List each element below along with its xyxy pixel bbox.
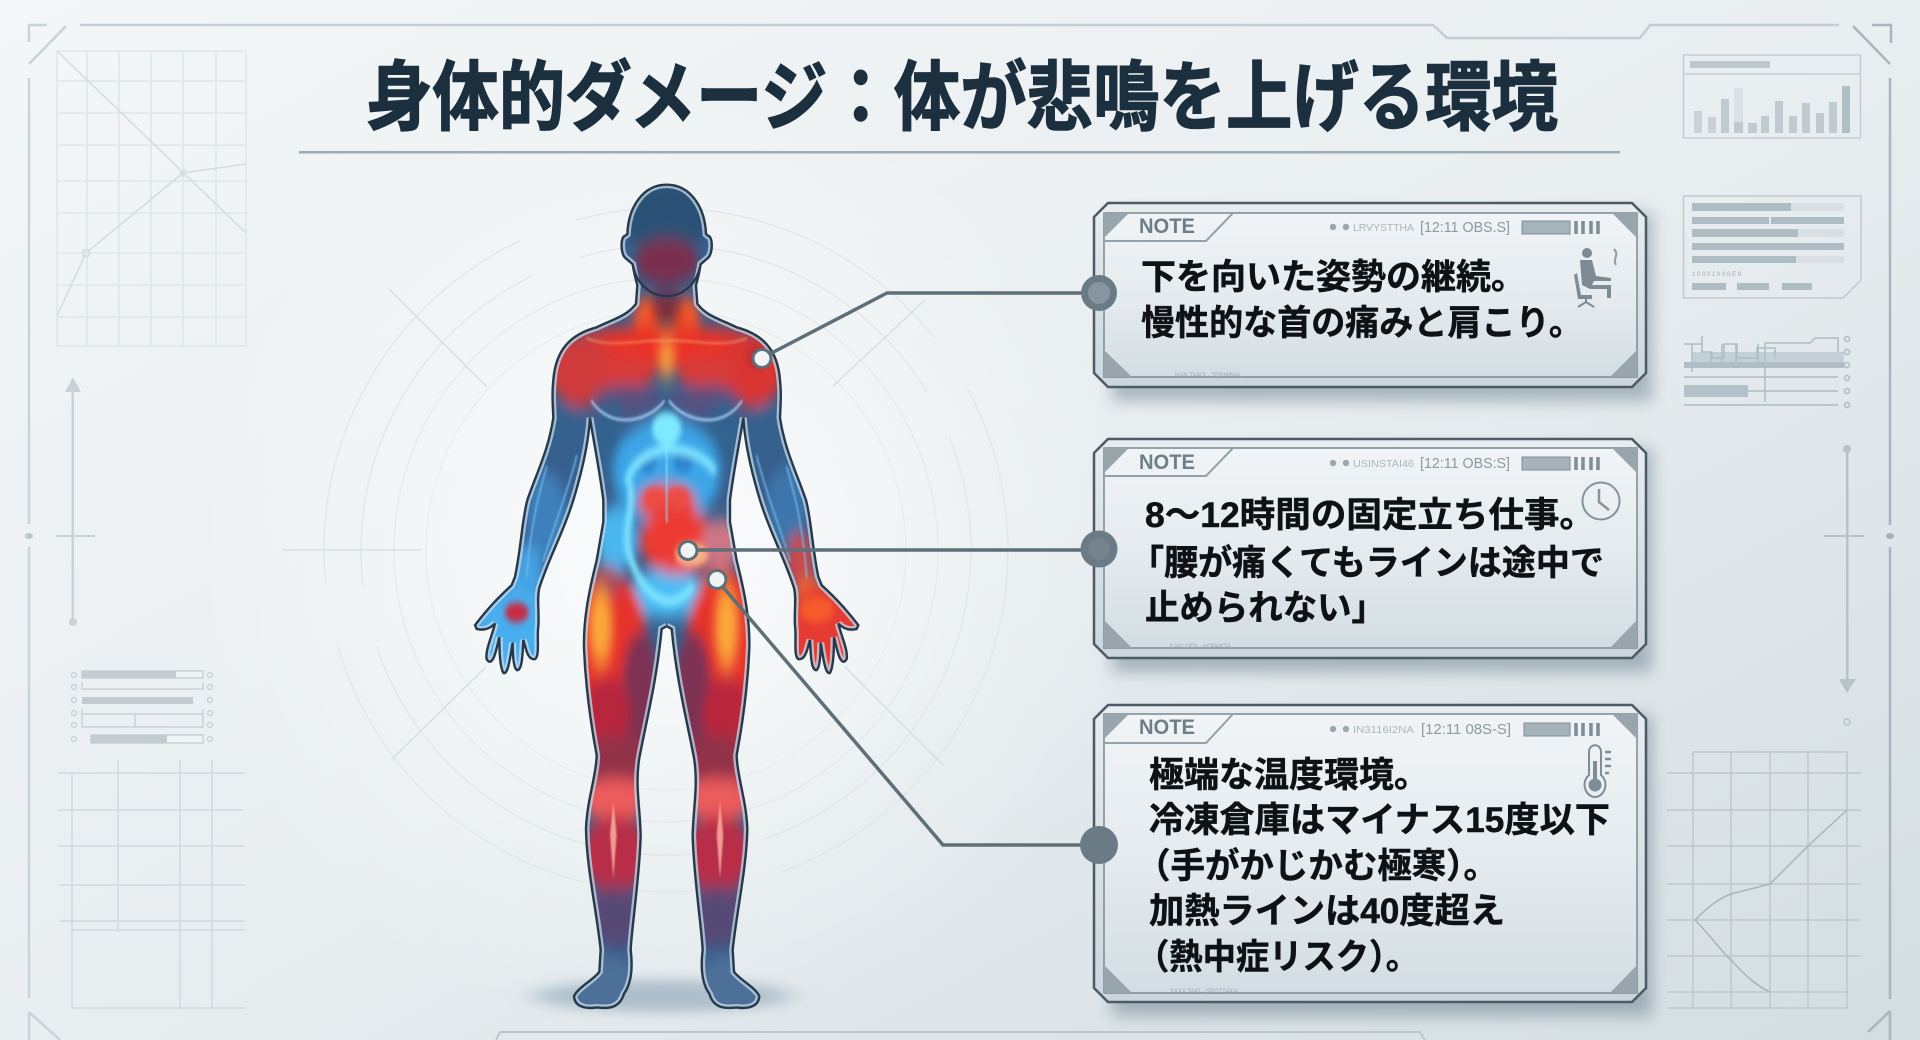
note text: 下を向いた姿勢の継続。 [1141, 258, 1526, 297]
title rule [299, 151, 1620, 154]
note card 2: standing work [1094, 439, 1652, 672]
note text: 加熱ラインは40度超え [1149, 892, 1505, 931]
muscle lines [527, 338, 807, 879]
note header: NAN TAIKX · TERMINAL [1175, 373, 1242, 379]
note text: （熱中症リスク）。 [1136, 938, 1419, 977]
note text [1136, 756, 1610, 977]
note header [1139, 215, 1598, 379]
note header: XXXX TAKI · SPOTTAKA [1170, 989, 1237, 995]
left bottom grid [58, 760, 245, 1008]
note header: NOTE [1139, 451, 1195, 474]
leader line: shoulder to note 1 [753, 275, 1117, 368]
icon: thermometer [1585, 745, 1611, 797]
left line chart [57, 51, 246, 346]
note header [1139, 451, 1598, 650]
note text [1130, 496, 1604, 628]
human body figure [440, 160, 900, 1021]
concentric rings [282, 208, 1008, 892]
right horizontal bars panel [1684, 196, 1861, 298]
note header: IN3116I2NA [1353, 725, 1414, 736]
inner outline halo [475, 185, 858, 1008]
right vertical arrow [1824, 445, 1864, 725]
leader line: hip to note 3 [708, 570, 1118, 864]
right horizontal bars panel: 1 0 0 0 1 0 0 0 E 9 [1692, 272, 1742, 278]
note header: [12:11 OBS.S] [1420, 219, 1510, 236]
note text: 極端な温度環境。 [1149, 756, 1429, 795]
soft orange highlights [589, 297, 739, 670]
note header: [12:11 08S-S] [1421, 721, 1511, 738]
icon: seated person [1574, 248, 1616, 307]
body heat colours [475, 179, 860, 1021]
note header: LRVYSTTHA [1353, 223, 1414, 234]
leader line: lower back to note 2 [679, 530, 1118, 568]
title: 身体的ダメージ：体が悲鳴を上げる環境 [366, 56, 1558, 141]
note card 1: neck and shoulder [1094, 203, 1652, 401]
note text: 冷凍倉庫はマイナス15度以下 [1149, 801, 1610, 840]
note header: [12:11 OBS:S] [1420, 455, 1510, 472]
bright glow layer [505, 345, 833, 623]
icon: clock [1582, 482, 1620, 520]
right bar chart panel [1683, 55, 1861, 138]
note header: NOTE [1139, 716, 1195, 739]
note text: 止められない」 [1145, 589, 1386, 628]
left small bars [72, 671, 212, 743]
note header: USINSTAI46 [1353, 459, 1414, 470]
left vertical arrow [56, 377, 95, 626]
note text: （手がかじかむ極寒）。 [1136, 847, 1498, 886]
note card 3: extreme temperature [1094, 705, 1652, 1016]
right bottom chart [1667, 752, 1861, 1008]
note header: EAKLDFN · HOPAKTA [1170, 644, 1231, 650]
note header: NOTE [1139, 215, 1195, 238]
note text [1141, 258, 1583, 343]
note header [1139, 716, 1598, 995]
note text: 8〜12時間の固定立ち仕事。 [1145, 496, 1595, 535]
body outline [475, 185, 858, 1008]
note text: 「腰が痛くてもラインは途中で [1130, 544, 1604, 583]
ground shadow [532, 980, 792, 1012]
right signal panel [1684, 336, 1850, 408]
note text: 慢性的な首の痛みと肩こり。 [1141, 304, 1583, 343]
